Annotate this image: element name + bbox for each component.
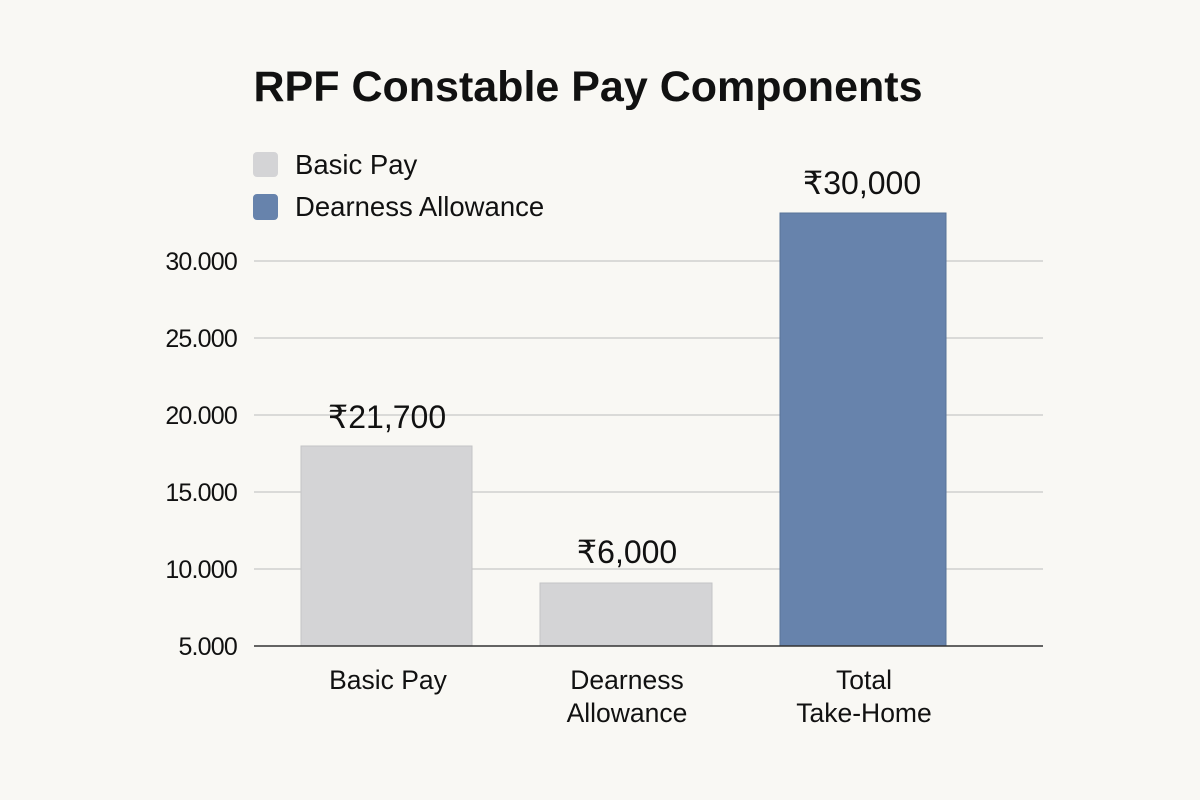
x axis labels: Take-Home: [796, 698, 932, 728]
x axis labels: Basic Pay: [329, 665, 448, 695]
legend: [253, 149, 544, 222]
bar: basic pay: ₹21,700: [328, 399, 446, 435]
x axis labels: [329, 665, 932, 728]
bar: dearness allowance: [540, 534, 712, 646]
y axis labels: 10.000: [165, 556, 237, 584]
y axis labels: 5.000: [178, 633, 237, 661]
legend: dearness allowance: Dearness Allowance: [295, 191, 544, 222]
y axis labels: [165, 248, 237, 661]
y axis labels: 25.000: [165, 325, 237, 353]
y axis labels: 30.000: [165, 248, 237, 276]
bar: dearness allowance: ₹6,000: [577, 534, 677, 570]
x axis labels: Allowance: [567, 698, 687, 728]
x axis labels: Total: [836, 665, 892, 695]
x axis labels: Dearness: [570, 665, 684, 695]
legend: basic pay: Basic Pay: [295, 149, 418, 180]
bar: basic pay: [301, 399, 472, 646]
y axis labels: 15.000: [165, 479, 237, 507]
bar: total take-home: ₹30,000: [803, 165, 921, 201]
y axis labels: 20.000: [165, 402, 237, 430]
bar: total take-home: [780, 165, 946, 646]
title: RPF Constable Pay Components: [254, 63, 922, 111]
